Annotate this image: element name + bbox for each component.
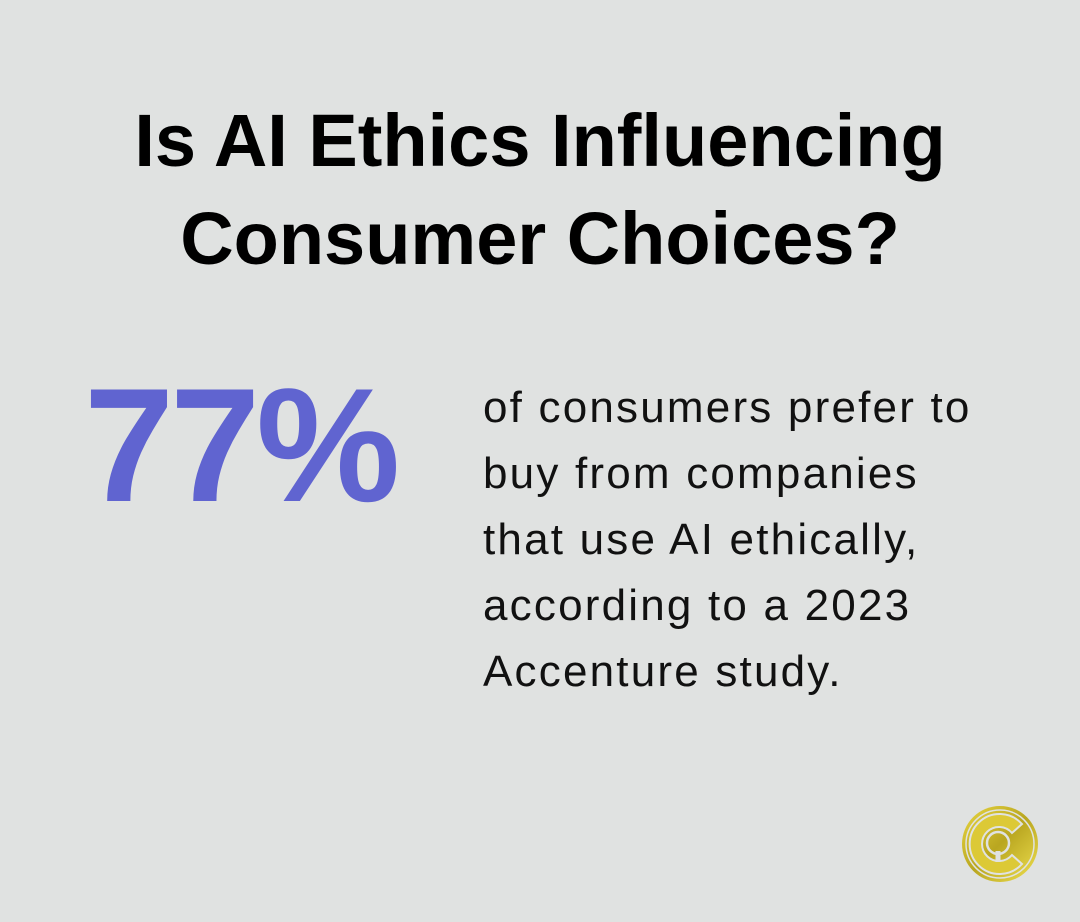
text block: description — [483, 383, 972, 696]
stat: 77%: 77% — [84, 355, 396, 536]
title — [134, 99, 946, 280]
text block: description: Accenture study. — [483, 647, 843, 696]
title: Is AI Ethics Influencing — [134, 99, 946, 182]
title: Consumer Choices? — [180, 197, 900, 280]
icon: logo — [962, 806, 1038, 882]
text block: description: buy from companies — [483, 449, 919, 498]
text block: description: that use AI ethically, — [483, 515, 919, 564]
text block: description: of consumers prefer to — [483, 383, 972, 432]
text block: description: according to a 2023 — [483, 581, 911, 630]
